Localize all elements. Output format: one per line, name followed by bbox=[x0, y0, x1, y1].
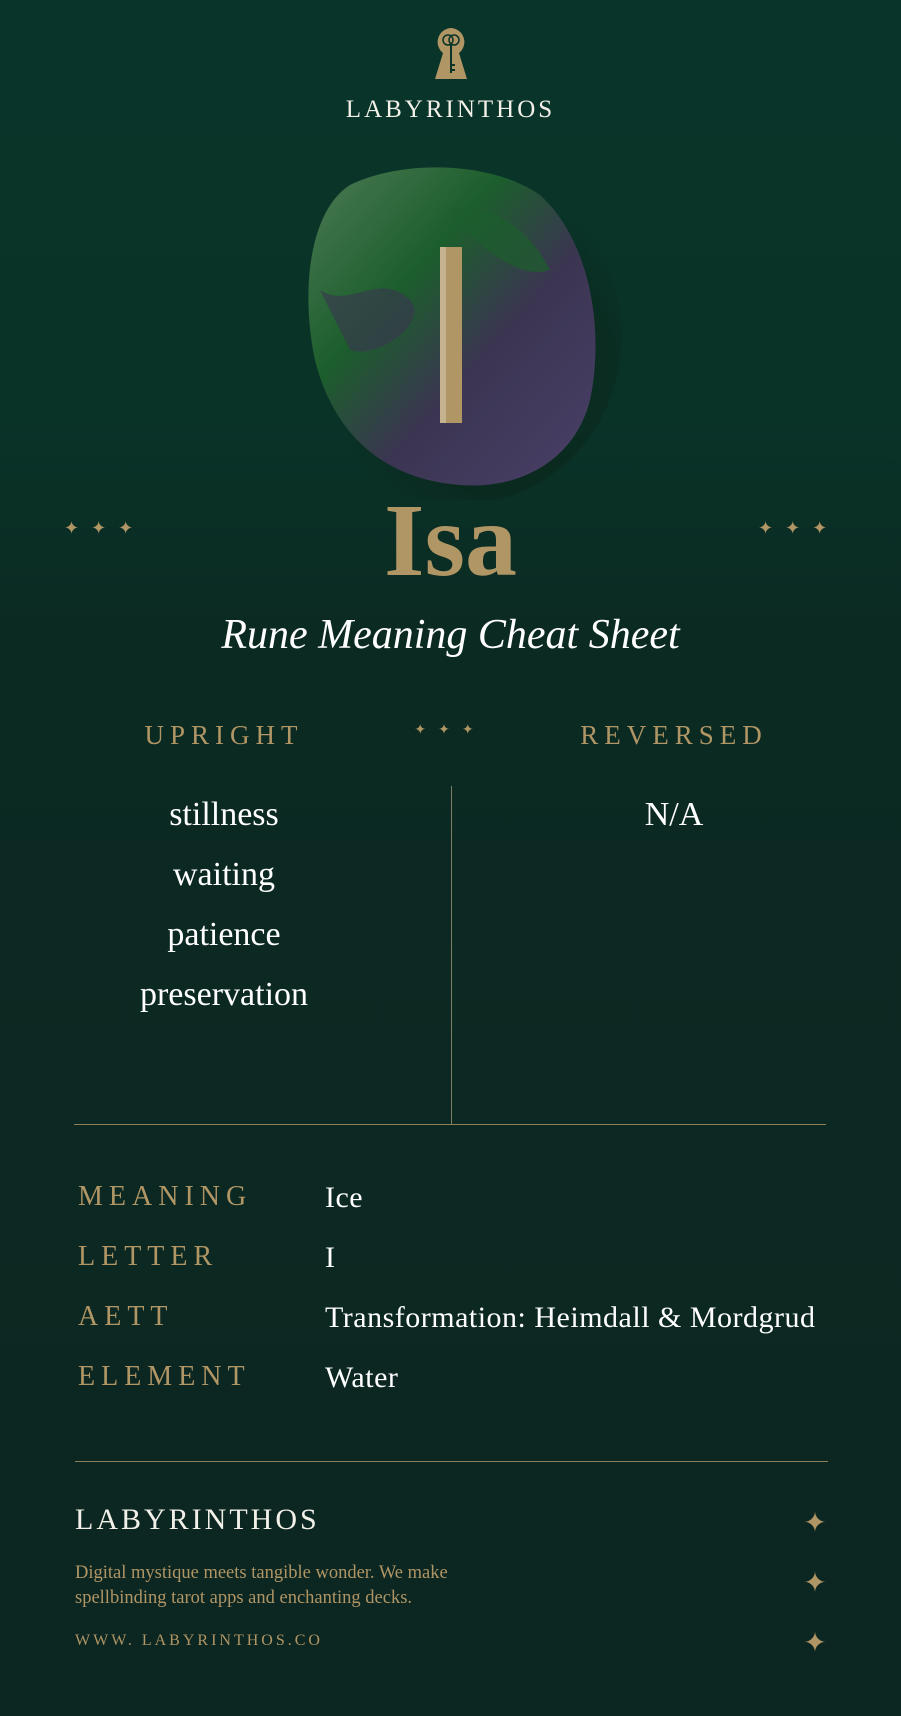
row: letter: LETTER bbox=[78, 1241, 218, 1272]
row: meaning bbox=[78, 1181, 363, 1214]
row: meaning: Ice bbox=[325, 1181, 363, 1214]
stars left: ✦✦✦ bbox=[64, 518, 145, 538]
vertical divider bbox=[451, 786, 452, 1124]
upright meanings: waiting bbox=[173, 856, 275, 893]
row: element: Water bbox=[325, 1361, 398, 1394]
row: aett bbox=[78, 1301, 816, 1334]
row: letter bbox=[78, 1241, 335, 1274]
row: element: ELEMENT bbox=[78, 1361, 251, 1392]
logo wordmark: LABYRINTHOS bbox=[346, 96, 555, 123]
reversed meanings: N/A bbox=[645, 796, 703, 833]
info table bbox=[78, 1181, 816, 1394]
footer url: WWW. LABYRINTHOS.CO bbox=[75, 1632, 323, 1649]
row: letter: I bbox=[325, 1241, 335, 1274]
footer stars: ✦ bbox=[803, 1628, 827, 1659]
footer stars: ✦ bbox=[803, 1508, 827, 1539]
footer stars bbox=[803, 1508, 827, 1659]
heading: upright: UPRIGHT bbox=[144, 720, 304, 750]
stars right: ✦✦✦ bbox=[758, 518, 839, 538]
footer wordmark: LABYRINTHOS bbox=[75, 1503, 320, 1536]
heading: reversed: REVERSED bbox=[580, 720, 768, 750]
footer divider bbox=[75, 1461, 828, 1462]
logo: key icon bbox=[435, 28, 467, 79]
stars center: ✦✦✦ bbox=[414, 723, 486, 738]
upright meanings bbox=[140, 796, 308, 1013]
upright meanings: preservation bbox=[140, 976, 308, 1013]
row: meaning: MEANING bbox=[78, 1181, 252, 1212]
footer tagline: Digital mystique meets tangible wonder. We make spellbinding tarot apps and enchanting decks. bbox=[75, 1563, 448, 1608]
row: element bbox=[78, 1361, 398, 1394]
title: Isa: Isa bbox=[384, 483, 517, 598]
upright meanings: stillness bbox=[169, 796, 279, 833]
rune glyph: isa bbox=[440, 247, 462, 423]
horizontal divider bbox=[74, 1124, 826, 1125]
subtitle: Rune Meaning Cheat Sheet bbox=[221, 612, 680, 658]
row: aett: Transformation: Heimdall & Mordgrud bbox=[325, 1301, 816, 1334]
row: aett: AETT bbox=[78, 1301, 174, 1332]
rune stone image bbox=[308, 167, 596, 486]
upright meanings: patience bbox=[167, 916, 281, 953]
footer stars: ✦ bbox=[803, 1568, 827, 1599]
